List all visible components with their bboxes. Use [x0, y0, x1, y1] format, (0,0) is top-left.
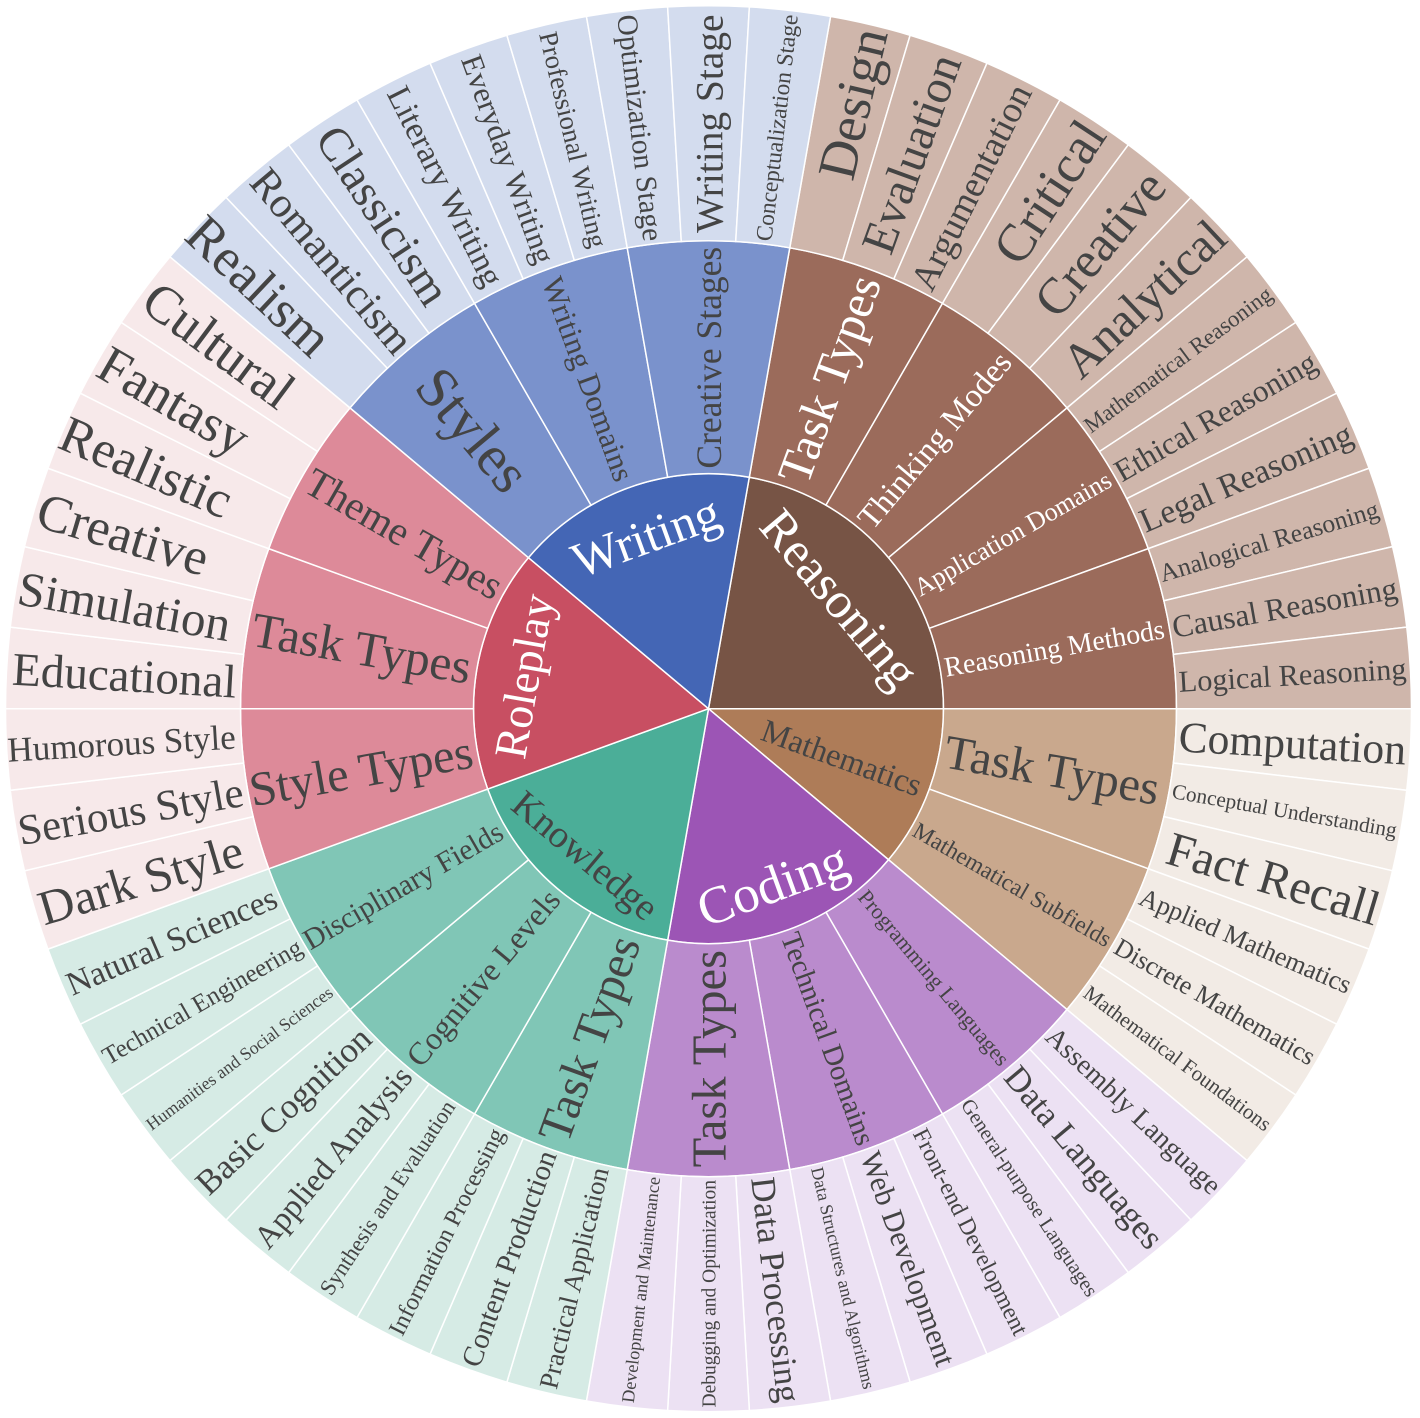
segment: Writing Domains: [472, 241, 706, 519]
leaf: General-purpose Languages: [931, 1077, 1129, 1319]
leaf: Assembly Language: Assembly Language: [1039, 1021, 1227, 1201]
leaf: Data Processing: Data Processing: [743, 1175, 808, 1405]
leaf: Discrete Mathematics: [1093, 907, 1338, 1096]
leaf: Analytical: Analytical: [1051, 209, 1237, 389]
leaf: Serious Style: Serious Style: [14, 769, 247, 855]
leaf: Professional Writing: Professional Writing: [533, 29, 613, 251]
panel: Writing: [167, 6, 831, 749]
segment: Mathematics: [681, 633, 957, 865]
leaf: Information Processing: [356, 1108, 535, 1355]
leaf: Serious Style: [9, 750, 255, 871]
panel: Coding: [586, 669, 1248, 1412]
segment: Application Domains: Application Domains: [909, 465, 1117, 602]
panel: Reasoning: [611, 15, 1413, 824]
segment: Task Types (Mathematics): Task Types: [940, 726, 1164, 816]
segment: Style Types: [233, 669, 495, 870]
segment: Mathematical Subfields: Mathematical Subfields: [908, 818, 1116, 953]
leaf: Applied Analysis: Applied Analysis: [247, 1060, 420, 1256]
leaf: Mathematical Reasoning: [1059, 256, 1297, 462]
leaf: Everyday Writing: [430, 34, 587, 284]
leaf: Synthesis and Evaluation: Synthesis and Evaluation: [314, 1096, 460, 1300]
leaf: Data Structures and Algorithms: Data Structures and Algorithms: [807, 1165, 879, 1391]
leaf: Simulation: [9, 546, 255, 668]
segment: Mathematical Subfields: [868, 754, 1154, 1013]
leaf: Mathematical Foundations: Mathematical Foundations: [1079, 981, 1276, 1136]
segment: Theme Types: Theme Types: [297, 458, 511, 609]
leaf: Web Development: [830, 1134, 987, 1383]
segment: Coding: [598, 669, 899, 970]
leaf: Content Production: Content Production: [456, 1146, 564, 1371]
leaf: Legal Reasoning: Legal Reasoning: [1134, 416, 1358, 540]
leaf: Realistic: [47, 393, 296, 561]
leaf: Data Processing: [722, 1168, 831, 1412]
leaf: Design: Design: [806, 22, 900, 185]
segment: Theme Types: [263, 404, 549, 663]
leaf: Humorous Style: Humorous Style: [6, 718, 237, 770]
segment: Application Domains: [868, 404, 1154, 663]
leaf: Dark Style: [23, 804, 273, 949]
segment: Cognitive Levels: [345, 834, 622, 1119]
leaf: Data Languages: Data Languages: [996, 1058, 1172, 1257]
leaf: Front-end Development: Front-end Development: [907, 1124, 1033, 1340]
leaf: Humorous Style: [4, 695, 244, 790]
leaf: Fantasy: Fantasy: [87, 335, 260, 468]
segment: Writing: Writing: [564, 484, 727, 589]
segment: Programming Languages: Programming Languages: [853, 885, 1015, 1071]
leaf: Everyday Writing: Everyday Writing: [454, 50, 561, 268]
leaf: Ethical Reasoning: [1093, 322, 1338, 510]
leaf: Design: [776, 15, 910, 264]
leaf: Synthesis and Evaluation: [288, 1077, 486, 1319]
leaf: Humanities and Social Sciences: [120, 955, 358, 1161]
leaf: Practical Application: Practical Application: [533, 1164, 615, 1392]
leaf: Dark Style: Dark Style: [32, 823, 250, 936]
leaf: Debugging and Optimization: [668, 1176, 749, 1412]
segment: Task Types (Coding): [627, 940, 790, 1177]
leaf: Natural Sciences: [47, 856, 296, 1025]
leaf: Data Languages: [978, 1040, 1192, 1273]
segment: Task Types (Coding): Task Types: [683, 950, 736, 1167]
leaf: Optimization Stage: Optimization Stage: [610, 13, 668, 243]
segment: Knowledge: Knowledge: [503, 783, 666, 929]
segment: Knowledge: [467, 633, 799, 964]
leaf: Creative: Creative: [1024, 160, 1178, 328]
segment: Thinking Modes: [795, 298, 1072, 584]
leaf: Professional Writing: [507, 15, 641, 264]
leaf: Data Structures and Algorithms: [776, 1154, 910, 1402]
leaf: Critical: [931, 99, 1129, 341]
leaf: Web Development: Web Development: [853, 1147, 963, 1371]
leaf: Mathematical Foundations: [1059, 955, 1297, 1161]
segment: Writing Domains: Writing Domains: [535, 272, 641, 486]
segment: Task Types (Knowledge): Task Types: [528, 929, 651, 1149]
leaf: Content Production: [430, 1134, 587, 1383]
leaf: Development and Maintenance: [586, 1168, 695, 1412]
segment: Technical Domains: [711, 898, 945, 1176]
panel: Roleplay: [4, 256, 729, 949]
leaf: Educational: [4, 627, 244, 722]
segment: Task Types (Knowledge): [472, 898, 706, 1176]
leaf: Ethical Reasoning: Ethical Reasoning: [1108, 344, 1323, 489]
leaf: Romanticism: Romanticism: [240, 159, 423, 364]
panel: Mathematics: [681, 633, 1413, 1161]
leaf: Literary Writing: Literary Writing: [379, 80, 511, 293]
segment: Reasoning: Reasoning: [748, 499, 929, 700]
leaf: Literary Writing: [356, 62, 535, 310]
segment: Coding: Coding: [689, 831, 856, 939]
leaf: Realism: Realism: [174, 203, 344, 368]
leaf: Conceptual Understanding: Conceptual Understanding: [1170, 779, 1399, 842]
segment: Task Types (Mathematics): [922, 669, 1184, 870]
leaf: Assembly Language: [1020, 1000, 1248, 1221]
leaf: Causal Reasoning: Causal Reasoning: [1169, 571, 1400, 645]
leaf: Argumentation: [882, 62, 1061, 310]
segment: Task Types (Roleplay): Task Types: [248, 602, 476, 695]
leaf: Mathematical Reasoning: Mathematical Reasoning: [1079, 281, 1277, 438]
segment: Reasoning Methods: [922, 547, 1184, 749]
leaf: Realistic: Realistic: [51, 406, 241, 530]
leaf: Critical: Critical: [982, 110, 1118, 275]
leaf: Creative: [978, 144, 1192, 377]
leaf: Evaluation: Evaluation: [851, 47, 972, 261]
leaf: Applied Mathematics: [1121, 856, 1370, 1025]
leaf: Conceptual Understanding: [1162, 750, 1408, 871]
leaf: Conceptualization Stage: [722, 6, 831, 249]
leaf: Creative (Roleplay): Creative: [30, 483, 215, 588]
panel: Knowledge: [47, 633, 799, 1402]
leaf: Fantasy: [79, 322, 324, 510]
leaf: Cultural: Cultural: [131, 271, 305, 421]
segment: Styles: [345, 298, 622, 584]
leaf: Writing Stage: Writing Stage: [687, 15, 731, 233]
segment: Thinking Modes: Thinking Modes: [851, 345, 1020, 536]
leaf: Optimization Stage: [586, 6, 695, 249]
leaf: Classicism: [288, 99, 486, 341]
leaf: Argumentation: Argumentation: [903, 77, 1041, 297]
leaf: Practical Application: [507, 1154, 641, 1402]
leaf: Conceptualization Stage: Conceptualization Stage: [751, 13, 804, 243]
leaf: Applied Analysis: [225, 1040, 439, 1273]
leaf: Fact Recall: Fact Recall: [1161, 822, 1386, 936]
segment: Writing: [518, 448, 819, 749]
leaf: Information Processing: Information Processing: [384, 1124, 510, 1340]
segment: Mathematics: Mathematics: [756, 713, 926, 804]
leaf: Simulation: Simulation: [14, 561, 235, 652]
segment: Disciplinary Fields: [263, 754, 549, 1013]
segment: Disciplinary Fields: Disciplinary Fields: [298, 816, 509, 957]
leaf: Basic Cognition: [169, 1000, 397, 1221]
segment: Task Types (Reasoning): Task Types: [768, 268, 892, 491]
leaf: Cultural: [120, 256, 358, 462]
leaf: Creative (Roleplay): [23, 468, 273, 614]
leaf: Natural Sciences: Natural Sciences: [61, 880, 283, 1003]
segment: Reasoning: [611, 442, 986, 824]
segment: Technical Domains: Technical Domains: [774, 928, 881, 1150]
leaf: Humanities and Social Sciences: Humanities and Social Sciences: [142, 982, 337, 1134]
segment: Roleplay: [457, 552, 729, 824]
leaf: Technical Engineering: [79, 907, 324, 1096]
segment: Cognitive Levels: Cognitive Levels: [399, 882, 567, 1073]
leaf: Discrete Mathematics: Discrete Mathematics: [1109, 932, 1321, 1071]
segment: Reasoning Methods: Reasoning Methods: [942, 614, 1167, 684]
leaf: Analytical: [1020, 197, 1248, 418]
leaf: Logical Reasoning: Logical Reasoning: [1178, 652, 1407, 699]
leaf: Educational: Educational: [11, 644, 238, 709]
segment: Creative Stages: Creative Stages: [689, 247, 729, 469]
leaf: Technical Engineering: Technical Engineering: [98, 934, 308, 1071]
leaf: Evaluation: [830, 34, 987, 284]
segment: Styles: Styles: [403, 354, 544, 505]
leaf: Front-end Development: [882, 1108, 1061, 1355]
leaf: Writing Stage: [668, 6, 749, 241]
leaf: Analogical Reasoning: Analogical Reasoning: [1156, 495, 1382, 588]
segment: Task Types (Roleplay): [233, 547, 495, 749]
leaf: Analogical Reasoning: [1144, 468, 1394, 614]
leaf: General-purpose Languages: General-purpose Languages: [956, 1095, 1102, 1301]
leaf: Logical Reasoning: [1173, 627, 1413, 722]
segment: Creative Stages: [627, 241, 790, 477]
leaf: Applied Mathematics: Applied Mathematics: [1135, 882, 1356, 1000]
leaf: Causal Reasoning: [1162, 546, 1408, 668]
leaf: Computation: Computation: [1177, 713, 1408, 775]
leaf: Debugging and Optimization: Debugging and Optimization: [699, 1180, 720, 1407]
leaf: Classicism: Classicism: [305, 116, 460, 315]
leaf: Basic Cognition: Basic Cognition: [188, 1019, 379, 1203]
leaf: Computation: [1173, 695, 1413, 790]
segment: Roleplay: Roleplay: [484, 590, 563, 762]
leaf: Realism: [167, 195, 397, 418]
segment: Style Types: Style Types: [245, 726, 477, 817]
segment: Task Types (Reasoning): [711, 241, 945, 519]
leaf: Development and Maintenance: Development and Maintenance: [618, 1176, 664, 1404]
leaf: Legal Reasoning: [1121, 393, 1370, 561]
segment: Programming Languages: [795, 834, 1072, 1119]
